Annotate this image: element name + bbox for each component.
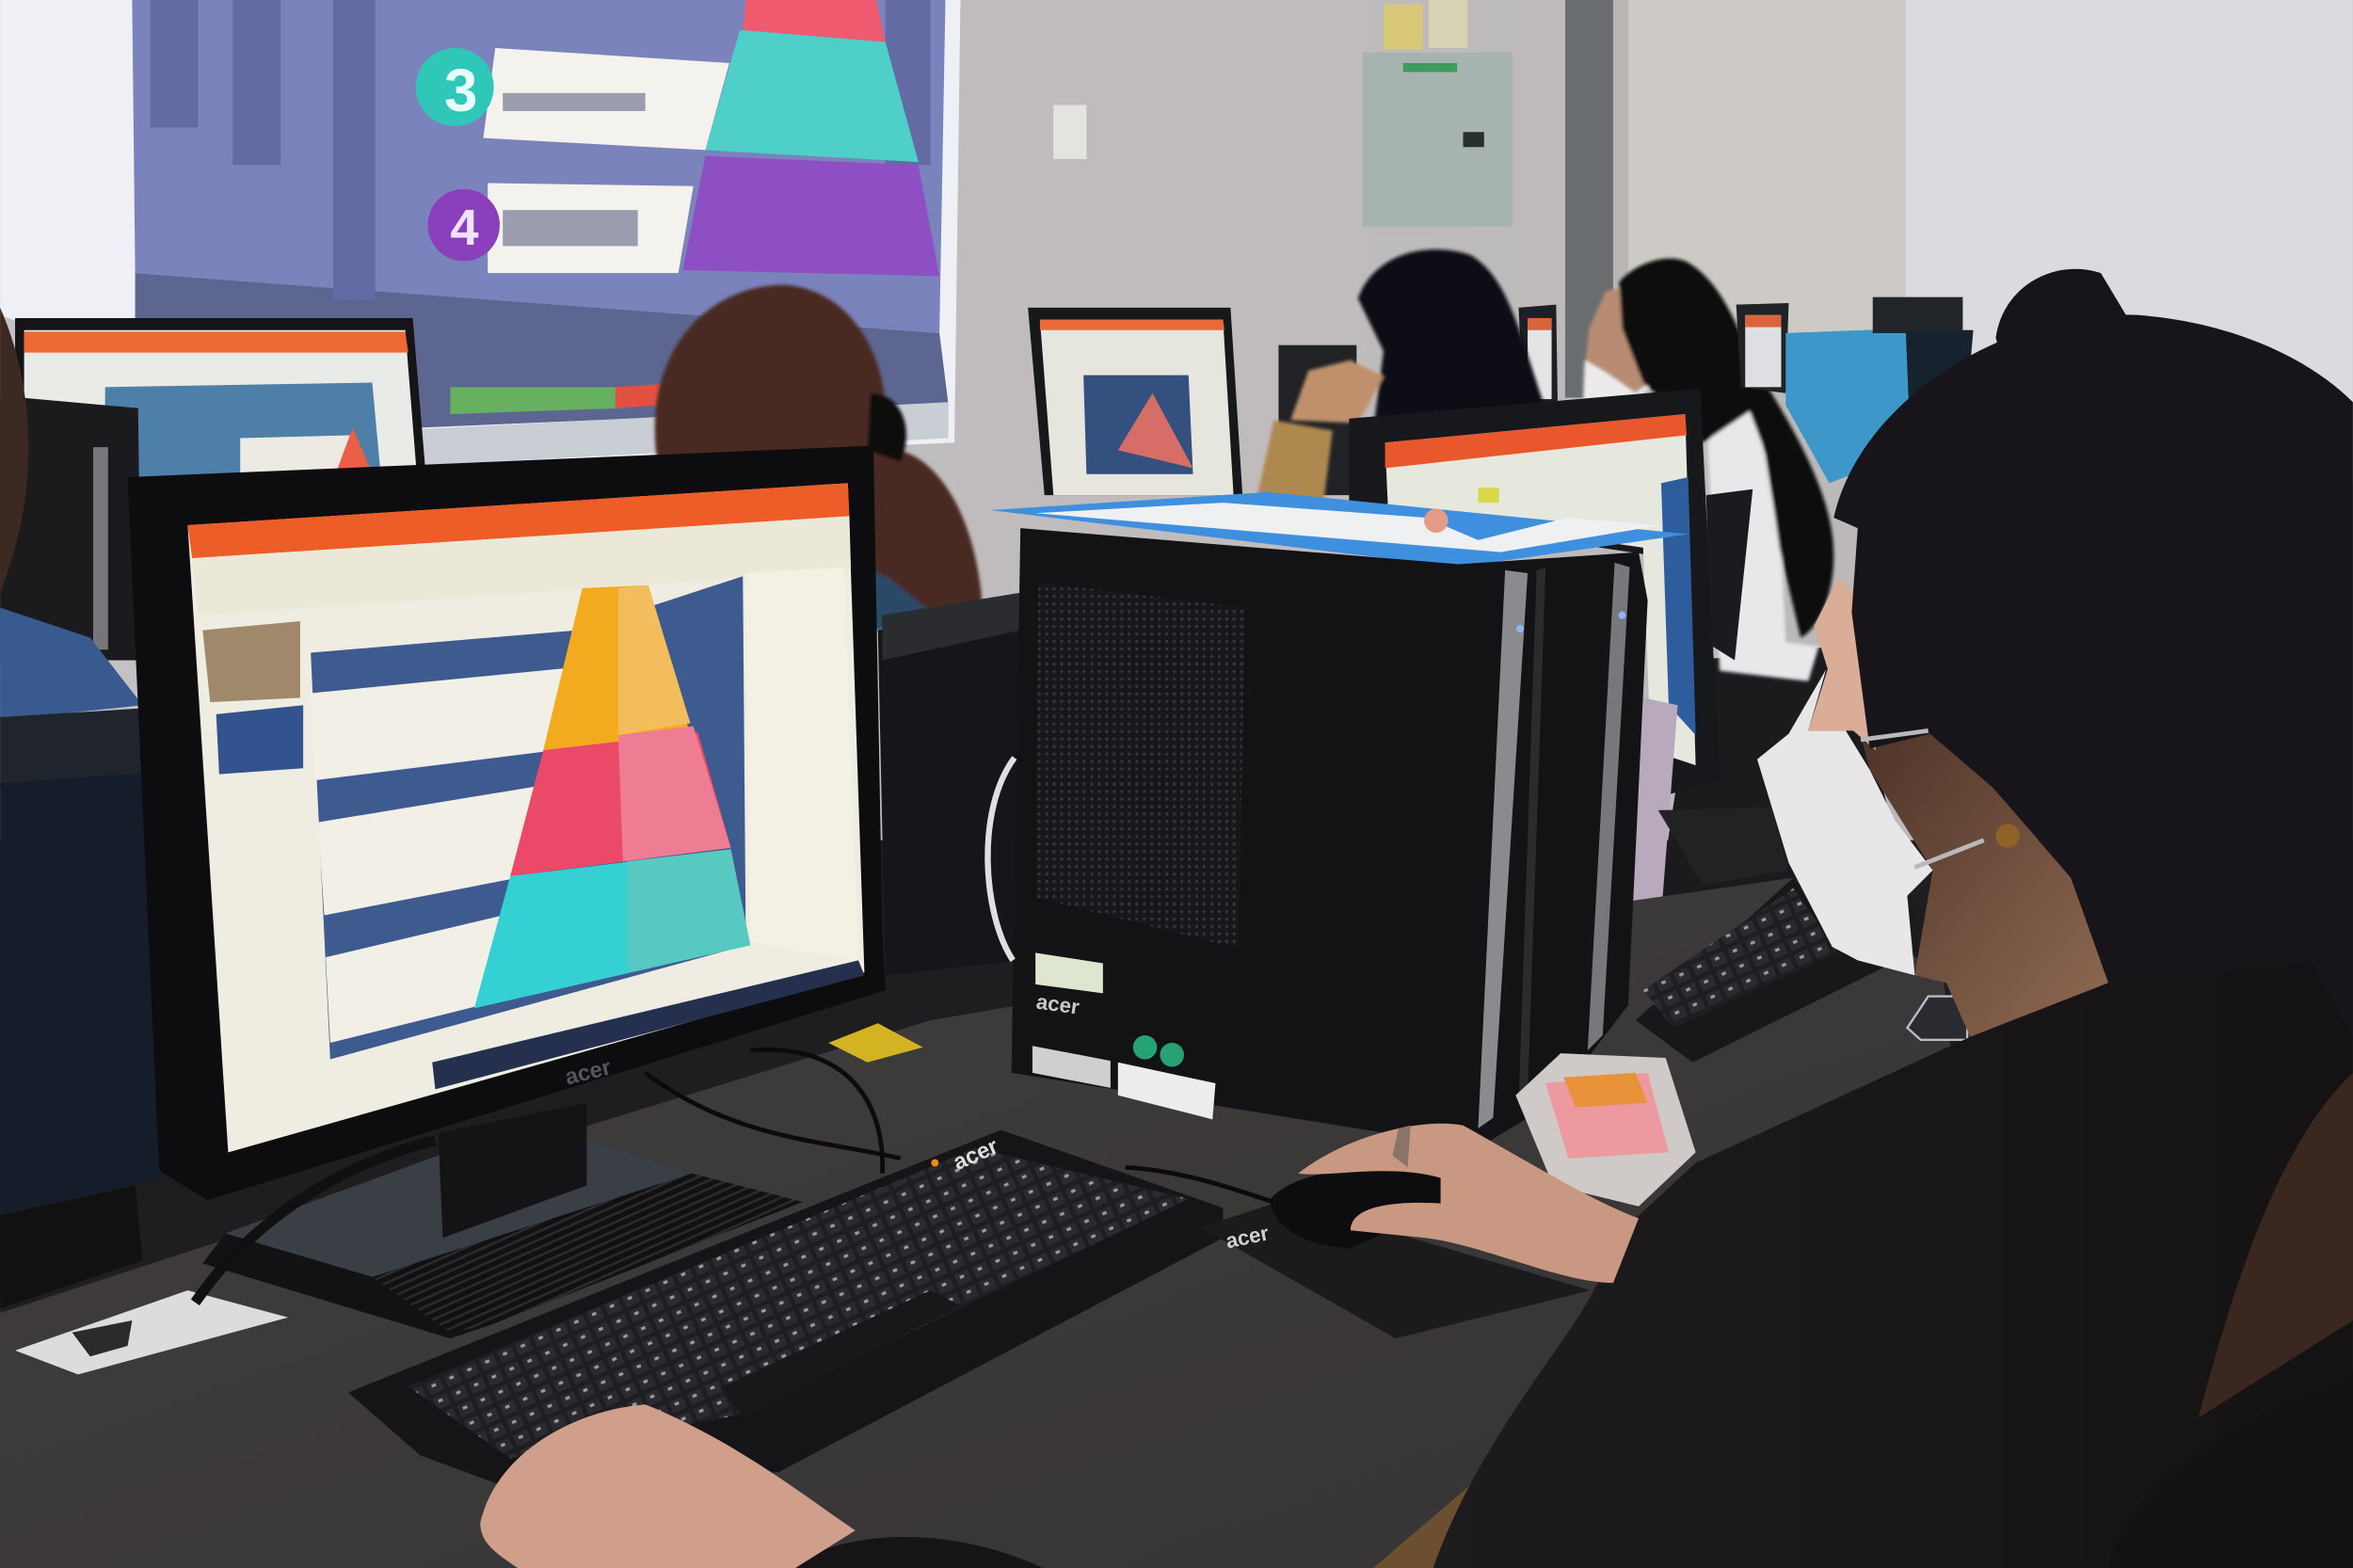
foreground hand on mouse: [1298, 1124, 1639, 1283]
plastic snack box: [1515, 1053, 1696, 1207]
background PC tower left: [0, 397, 141, 660]
cable grommet and cables: [15, 1049, 1290, 1374]
back-row monitors centre: [1028, 305, 1558, 495]
earring: [1995, 824, 2020, 848]
slide number 4: 4: [450, 200, 479, 256]
main keyboard: [348, 1129, 1223, 1489]
mask straps: [1861, 730, 1984, 867]
centre monitor behind tower: [1349, 389, 1753, 1058]
slide number 3: 3: [444, 56, 477, 124]
background monitor left: [15, 318, 426, 480]
dark room floor and furniture behind desk: [0, 646, 2353, 1568]
electrical cabinet: [1363, 0, 1513, 227]
woman in white shirt: [1583, 259, 1833, 681]
monitor stand: [202, 1103, 803, 1338]
monitor brand: acer: [563, 1054, 614, 1090]
woman in foreground: [788, 314, 2353, 1568]
phone on desk: [1907, 997, 1967, 1040]
face: [1808, 578, 1876, 750]
chair foreground: [2108, 1373, 2353, 1568]
tower brand: acer: [1034, 990, 1081, 1019]
main desk: [0, 878, 1951, 1568]
mouse pad brand: acer: [1224, 1221, 1271, 1253]
white cable and yellow tag beside tower: [828, 758, 1015, 1063]
jacket: [1433, 960, 2353, 1568]
main monitor: [128, 445, 886, 1200]
blue document folder on tower: [990, 492, 1689, 568]
mouse pad: [1201, 1200, 1591, 1338]
PC tower: [1012, 528, 1648, 1148]
back-row monitors right: [1737, 269, 2128, 483]
foreground hand on keyboard: [480, 1404, 856, 1568]
loose hair over back: [2199, 1073, 2353, 1418]
woman with ponytail: [655, 285, 983, 631]
keyboard brand: acer: [950, 1133, 1002, 1176]
back row chair and desk edge: [0, 308, 1020, 1308]
neck: [1861, 734, 2108, 1037]
projection screen: [0, 0, 960, 468]
face mask: [1757, 669, 1933, 975]
hair: [1833, 314, 2353, 1035]
woman in centre with hand to face: [1257, 249, 1545, 503]
mouse: [1270, 1168, 1441, 1248]
keyboard back: [1636, 808, 1883, 1063]
